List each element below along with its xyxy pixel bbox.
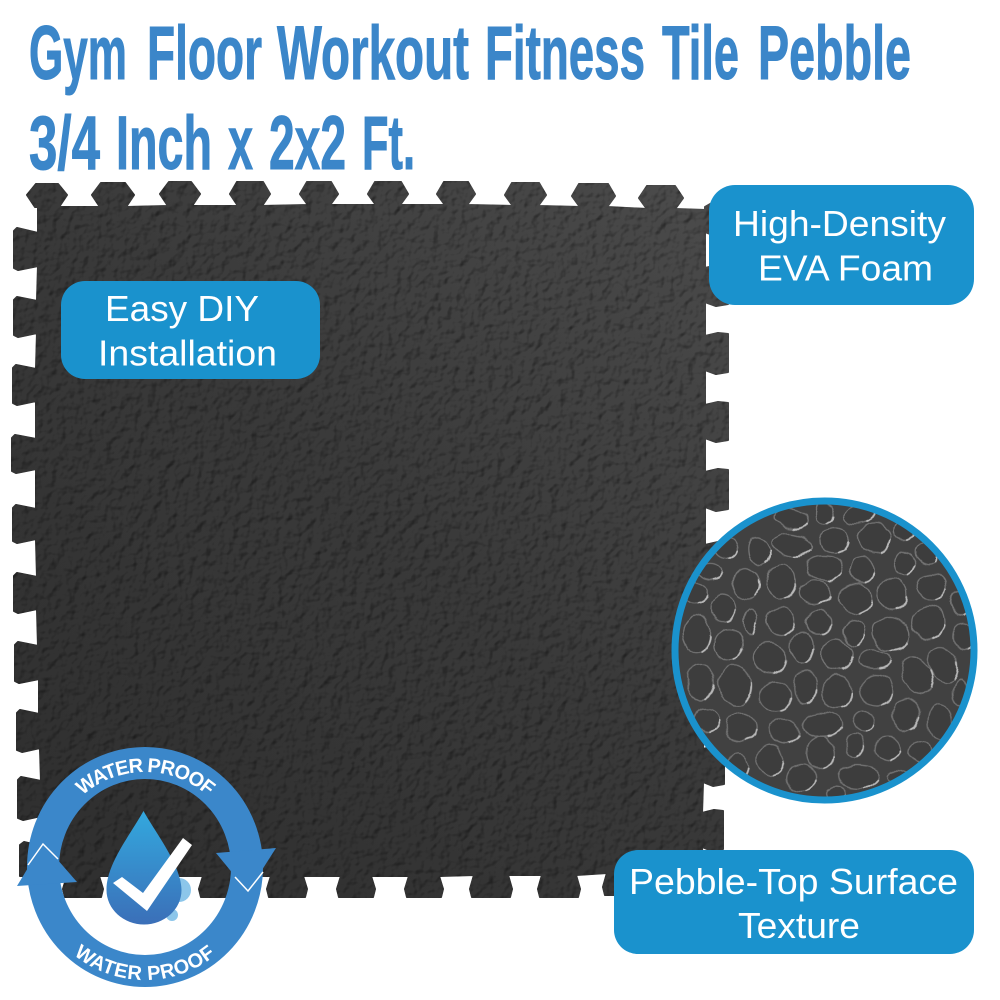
arrow: clockwise head at right <box>216 848 276 892</box>
callout: Easy DIY Installation: Easy DIY <box>105 288 259 329</box>
title: Workout <box>277 11 469 96</box>
panel: pebble texture close-up circle <box>674 500 974 800</box>
foam tile with interlocking edges <box>12 182 728 897</box>
callout: High-Density EVA Foam <box>709 185 974 305</box>
title: 3/4 <box>29 101 100 186</box>
title: Inch <box>116 101 212 186</box>
callout: High-Density EVA Foam: EVA Foam <box>758 248 933 288</box>
title <box>29 11 911 186</box>
badge text bottom: WATER PROOF <box>76 944 212 980</box>
callout: Pebble-Top Surface Texture: Texture <box>738 905 860 946</box>
title: Pebble <box>758 11 911 96</box>
callout: Easy DIY Installation: Installation <box>98 332 277 374</box>
pebble pattern <box>682 503 973 800</box>
title: Gym <box>29 11 127 96</box>
icon: small water droplets <box>166 878 191 921</box>
badge ring <box>43 763 247 971</box>
callout: High-Density EVA Foam: High-Density <box>733 203 946 244</box>
callout: Pebble-Top Surface Texture <box>614 850 974 954</box>
title: Ft. <box>362 101 415 186</box>
title: Floor <box>147 11 262 96</box>
icon: check mark <box>113 838 192 911</box>
callout: Pebble-Top Surface Texture: Pebble-Top Surface <box>629 861 958 902</box>
icon: water drop <box>106 811 182 924</box>
badge: water proof <box>17 747 276 987</box>
badge text top: WATER PROOF <box>74 758 216 794</box>
callout: Easy DIY Installation <box>61 281 320 379</box>
arrow: clockwise head at left <box>17 843 77 886</box>
title: Tile <box>662 11 739 96</box>
title: Fitness <box>485 11 645 96</box>
title: 2x2 <box>269 101 346 186</box>
title: x <box>228 101 253 186</box>
